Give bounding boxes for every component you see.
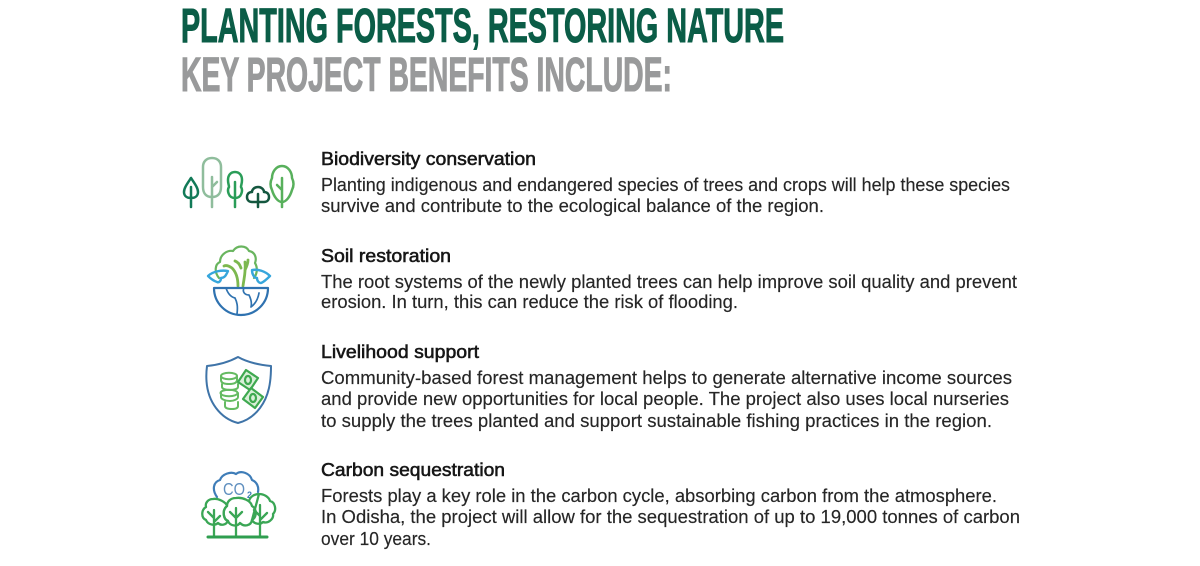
icon: CO2 cloud over trees xyxy=(202,472,275,537)
text: carbon description: over 10 years. xyxy=(321,529,431,549)
text: carbon description xyxy=(321,486,1020,549)
text: soil description: The root systems of the newly planted trees can help improve soil quality and prevent xyxy=(321,272,1017,292)
text: biodiversity description: survive and contribute to the ecological balance of the region. xyxy=(321,196,824,216)
panel: biodiversity conservation xyxy=(184,149,1010,216)
panel: livelihood support xyxy=(206,342,1012,431)
title: PLANTING FORESTS, RESTORING NATURE xyxy=(181,0,784,53)
icon: row of trees xyxy=(184,158,294,207)
heading: soil restoration: Soil restoration xyxy=(321,246,451,266)
icon: CO2 cloud over trees: CO xyxy=(223,479,245,499)
icon: shield with coins and banknotes xyxy=(206,357,271,423)
heading: biodiversity conservation: Biodiversity conservation xyxy=(321,149,536,169)
text: livelihood description: and provide new opportunities for local people. The project also uses local nurseries xyxy=(321,389,1009,409)
text: biodiversity description: Planting indigenous and endangered species of trees and crops will help these species xyxy=(321,175,1010,195)
icon: CO2 cloud over trees: 2 xyxy=(247,490,252,500)
text: soil description: erosion. In turn, this can reduce the risk of flooding. xyxy=(321,292,738,312)
text: carbon description: In Odisha, the project will allow for the sequestration of up to 19,000 tonnes of carbon xyxy=(321,507,1020,527)
text: biodiversity description xyxy=(321,175,1010,216)
text: carbon description: Forests play a key role in the carbon cycle, absorbing carbon from the atmosphere. xyxy=(321,486,997,506)
text: livelihood description: to supply the trees planted and support sustainable fishing practices in the region. xyxy=(321,411,992,431)
heading: carbon sequestration: Carbon sequestration xyxy=(321,460,505,480)
panel: carbon sequestration xyxy=(202,460,1020,549)
text: soil description xyxy=(321,272,1017,312)
subtitle: KEY PROJECT BENEFITS INCLUDE: xyxy=(181,49,672,102)
icon: tree on globe xyxy=(208,246,270,315)
panel: soil restoration xyxy=(208,246,1017,315)
text: livelihood description xyxy=(321,368,1012,431)
text: livelihood description: Community-based forest management helps to generate alternative income sources xyxy=(321,368,1012,388)
heading: livelihood support: Livelihood support xyxy=(321,342,479,362)
